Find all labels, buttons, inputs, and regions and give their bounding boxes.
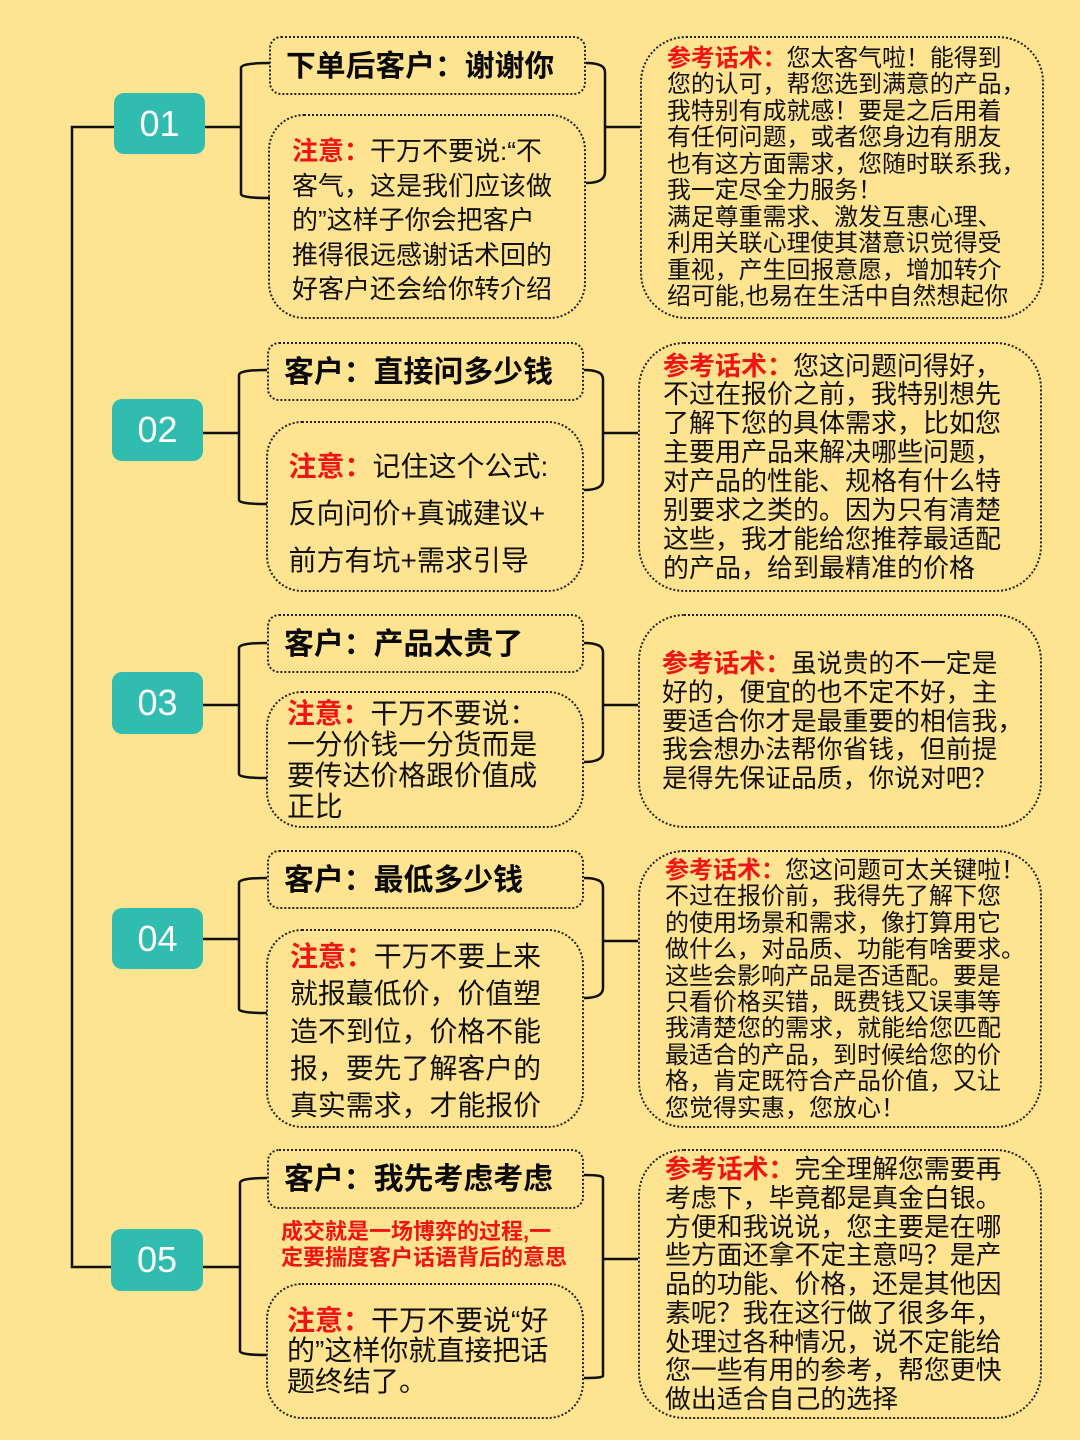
note text 03: 正比	[287, 791, 343, 822]
script text 04: 格，肯定既符合产品价值，又让	[665, 1068, 1001, 1095]
script text 03: 我会想办法帮你省钱，但前提	[662, 736, 997, 764]
script text 04: 参考话术：您这问题可太关键啦！	[665, 857, 1025, 884]
number badge 05: 05	[137, 1239, 177, 1280]
script box 01	[640, 36, 1044, 319]
note text 04: 真实需求，才能报价	[290, 1090, 541, 1121]
heading box 03	[267, 614, 584, 673]
number badge 05	[111, 1229, 203, 1291]
note text 02: 注意：记住这个公式:	[288, 450, 548, 482]
heading box 02	[267, 342, 584, 401]
script text 04: 不过在报价前，我得先了解下您	[665, 883, 1001, 910]
script text 05	[665, 1155, 1002, 1414]
note box 03	[266, 691, 584, 828]
script box 03	[638, 614, 1042, 828]
note text 03: 一分价钱一分货而是	[287, 729, 537, 760]
script text 01: 参考话术：您太客气啦！能得到	[667, 45, 1002, 72]
script text 04: 只看价格买错，既费钱又误事等	[665, 989, 1001, 1016]
script text 05: 参考话术：完全理解您需要再	[665, 1156, 1002, 1184]
number badge 02: 02	[137, 409, 178, 450]
section 05	[111, 1149, 1042, 1419]
note text 04: 造不到位，价格不能	[290, 1016, 541, 1046]
script text 04: 我清楚您的需求，就能给您匹配	[665, 1015, 1001, 1042]
script box 02	[638, 342, 1042, 592]
script text 04: 做什么，对品质、功能有啥要求。	[665, 936, 1025, 963]
number badge 04	[112, 908, 203, 969]
script text 01: 绍可能,也易在生活中自然想起你	[667, 283, 1008, 310]
heading text 02: 客户：直接问多少钱	[284, 356, 553, 389]
note text 01: 推得很远感谢话术回的	[292, 240, 552, 270]
note text 05	[287, 1304, 548, 1396]
note text 04	[290, 941, 541, 1121]
number badge 01	[114, 93, 205, 154]
note text 05: 的”这样你就直接把话	[287, 1335, 548, 1366]
script text 01: 重视，产生回报意愿，增加转介	[667, 256, 1001, 284]
note box 01	[268, 114, 586, 319]
section 02	[112, 342, 1042, 592]
note text 05: 注意：干万不要说“好	[287, 1304, 548, 1336]
note text 01: 注意：干万不要说:“不	[292, 136, 542, 166]
script text 01	[667, 45, 1025, 310]
script text 04: 的使用场景和需求，像打算用它	[665, 910, 1001, 937]
script text 02: 这些，我才能给您推荐最适配	[663, 524, 1001, 554]
section 04	[112, 850, 1042, 1128]
script text 01: 有任何问题，或者您身边有朋友	[667, 124, 1001, 151]
red callout 05: 定要揣度客户话语背后的意思	[281, 1245, 567, 1270]
note text 01: 好客户还会给你转介绍	[292, 274, 552, 304]
note text 04: 就报蕞低价，价值塑	[290, 978, 541, 1009]
note box 04	[266, 929, 584, 1128]
note text 01: 客气，这是我们应该做	[292, 170, 552, 200]
script text 03: 好的，便宜的也不定不好，主	[662, 679, 997, 707]
note box 05	[266, 1283, 584, 1419]
number badge 04: 04	[137, 918, 178, 959]
red callout 05: 成交就是一场博弈的过程,一	[281, 1219, 551, 1244]
script text 02: 不过在报价之前，我特别想先	[663, 379, 1001, 409]
note text 02: 反向问价+真诚建议+	[288, 498, 545, 528]
note text 03: 注意：干万不要说：	[287, 698, 537, 728]
script text 02: 别要求之类的。因为只有清楚	[663, 495, 1001, 525]
script text 02: 参考话术：您这问题问得好，	[663, 350, 1001, 380]
script text 01: 也有这方面需求，您随时联系我，	[667, 151, 1025, 178]
note text 02: 前方有坑+需求引导	[288, 544, 529, 576]
script text 03: 是得先保证品质，你说对吧？	[662, 765, 997, 793]
script box 04	[638, 850, 1042, 1128]
red callout 05	[281, 1219, 567, 1270]
heading text 01: 下单后客户：谢谢你	[286, 50, 554, 83]
number badge 01: 01	[139, 103, 180, 144]
script text 04: 您觉得实惠，您放心！	[665, 1095, 905, 1122]
heading box 01	[269, 36, 586, 95]
script text 01: 利用关联心理使其潜意识觉得受	[667, 230, 1001, 257]
note text 02	[288, 450, 548, 576]
heading text 05: 客户：我先考虑考虑	[284, 1163, 553, 1196]
heading box 04	[267, 850, 584, 909]
script text 03	[662, 650, 1023, 793]
note text 03	[287, 698, 537, 822]
script text 05: 考虑下，毕竟都是真金白银。	[665, 1185, 1002, 1213]
script text 05: 些方面还拿不定主意吗？是产	[665, 1242, 1002, 1270]
heading text 03: 客户：产品太贵了	[284, 628, 523, 661]
number badge 02	[112, 399, 203, 461]
heading box 05	[267, 1149, 584, 1209]
script text 01: 我特别有成就感！要是之后用着	[667, 98, 1001, 125]
script text 01: 您的认可，帮您选到满意的产品，	[667, 71, 1025, 98]
script text 05: 处理过各种情况，说不定能给	[665, 1328, 1002, 1356]
script text 03: 参考话术：虽说贵的不一定是	[662, 650, 997, 678]
note text 05: 题终结了。	[287, 1366, 427, 1396]
number badge 03: 03	[137, 682, 178, 723]
script text 04	[665, 857, 1025, 1122]
script text 03: 要适合你才是最重要的相信我，	[662, 708, 1023, 736]
script text 02: 对产品的性能、规格有什么特	[663, 466, 1001, 496]
script box 05	[638, 1149, 1042, 1419]
note text 04: 注意：干万不要上来	[290, 941, 541, 972]
script text 02: 了解下您的具体需求，比如您	[663, 408, 1001, 438]
script text 05: 您一些有用的参考，帮您更快	[665, 1357, 1002, 1385]
script text 04: 这些会影响产品是否适配。要是	[665, 963, 1001, 990]
note text 03: 要传达价格跟价值成	[287, 760, 537, 791]
script text 05: 品的功能、价格，还是其他因	[665, 1271, 1002, 1299]
script text 05: 方便和我说说，您主要是在哪	[665, 1214, 1002, 1242]
script text 02: 的产品，给到最精准的价格	[663, 553, 975, 583]
heading text 04: 客户：最低多少钱	[284, 864, 523, 897]
script text 04: 最适合的产品，到时候给您的价	[665, 1042, 1001, 1069]
script text 05: 素呢？我在这行做了很多年，	[665, 1300, 1002, 1328]
script text 01: 满足尊重需求、激发互惠心理、	[667, 204, 1001, 231]
script text 02: 主要用产品来解决哪些问题，	[663, 437, 1001, 467]
note text 04: 报，要先了解客户的	[290, 1053, 541, 1084]
script text 05: 做出适合自己的选择	[665, 1386, 898, 1414]
note box 02	[266, 421, 584, 592]
note text 01: 的”这样子你会把客户	[292, 205, 535, 235]
section 03	[112, 614, 1042, 828]
note text 01	[292, 136, 552, 304]
script text 01: 我一定尽全力服务！	[667, 177, 882, 204]
section 01	[114, 36, 1044, 319]
script text 02	[663, 350, 1001, 583]
number badge 03	[112, 672, 203, 734]
